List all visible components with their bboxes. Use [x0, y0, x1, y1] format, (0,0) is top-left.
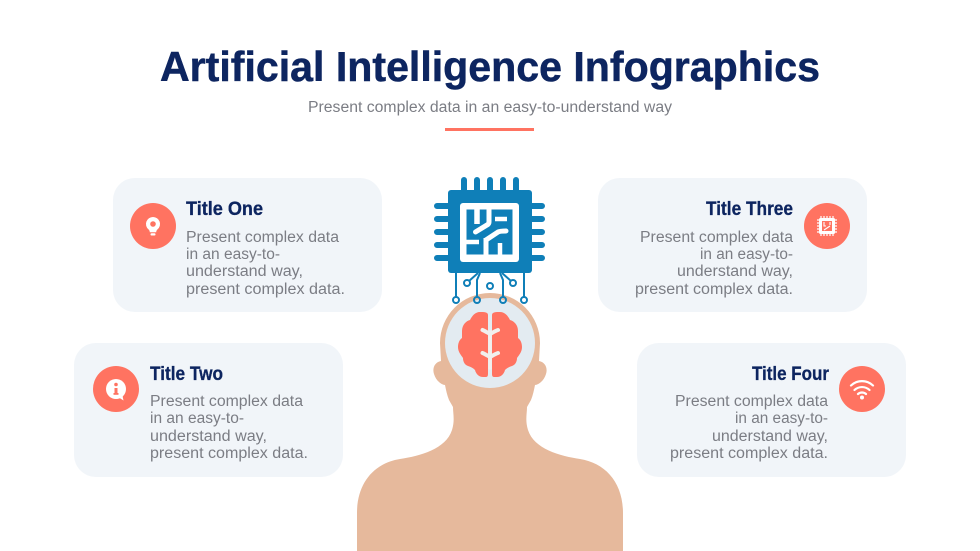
human figure [357, 293, 623, 551]
text block: title one: Present complex data [186, 229, 339, 246]
text block: title four: in an easy-to- [735, 410, 828, 427]
text block: title one [186, 229, 345, 298]
head circle [445, 298, 535, 388]
text block: title two [150, 393, 308, 462]
text block: title three: understand way, [677, 263, 793, 280]
text block: title four: understand way, [712, 428, 828, 445]
heading: title one: Title One [186, 199, 263, 220]
title underline [445, 128, 534, 131]
text block: title two: understand way, [150, 428, 267, 445]
title: Artificial Intelligence Infographics [160, 43, 820, 90]
icon: brain [458, 312, 522, 377]
text block: title one: present complex data. [186, 281, 345, 298]
text block: title four: Present complex data [675, 393, 828, 410]
icon: microchip with circuit lines [437, 180, 542, 303]
text block: title one: understand way, [186, 263, 303, 280]
heading: title three: Title Three [706, 199, 793, 220]
icon: microchip [804, 203, 850, 249]
text block: title two: in an easy-to- [150, 410, 244, 427]
panel: title one [113, 178, 382, 312]
icon: light bulb [130, 203, 176, 249]
subtitle: Present complex data in an easy-to-understand way [308, 99, 672, 116]
icon: info bubble [93, 366, 139, 412]
heading: title two: Title Two [150, 364, 223, 385]
text block: title three: Present complex data [640, 229, 793, 246]
circuit lines [453, 273, 527, 303]
panel: title four [637, 343, 906, 477]
panel: title two [74, 343, 343, 477]
panel: title three [598, 178, 867, 312]
text block: title three: present complex data. [635, 281, 793, 298]
text block: title two: present complex data. [150, 445, 308, 462]
text block: title three [635, 229, 793, 298]
heading: title four: Title Four [752, 364, 830, 385]
maze pattern [465, 208, 512, 256]
text block: title four [670, 393, 828, 462]
text block: title three: in an easy-to- [700, 246, 793, 263]
text block: title four: present complex data. [670, 445, 828, 462]
icon: wifi [839, 366, 885, 412]
text block: title one: in an easy-to- [186, 246, 280, 263]
text block: title two: Present complex data [150, 393, 303, 410]
